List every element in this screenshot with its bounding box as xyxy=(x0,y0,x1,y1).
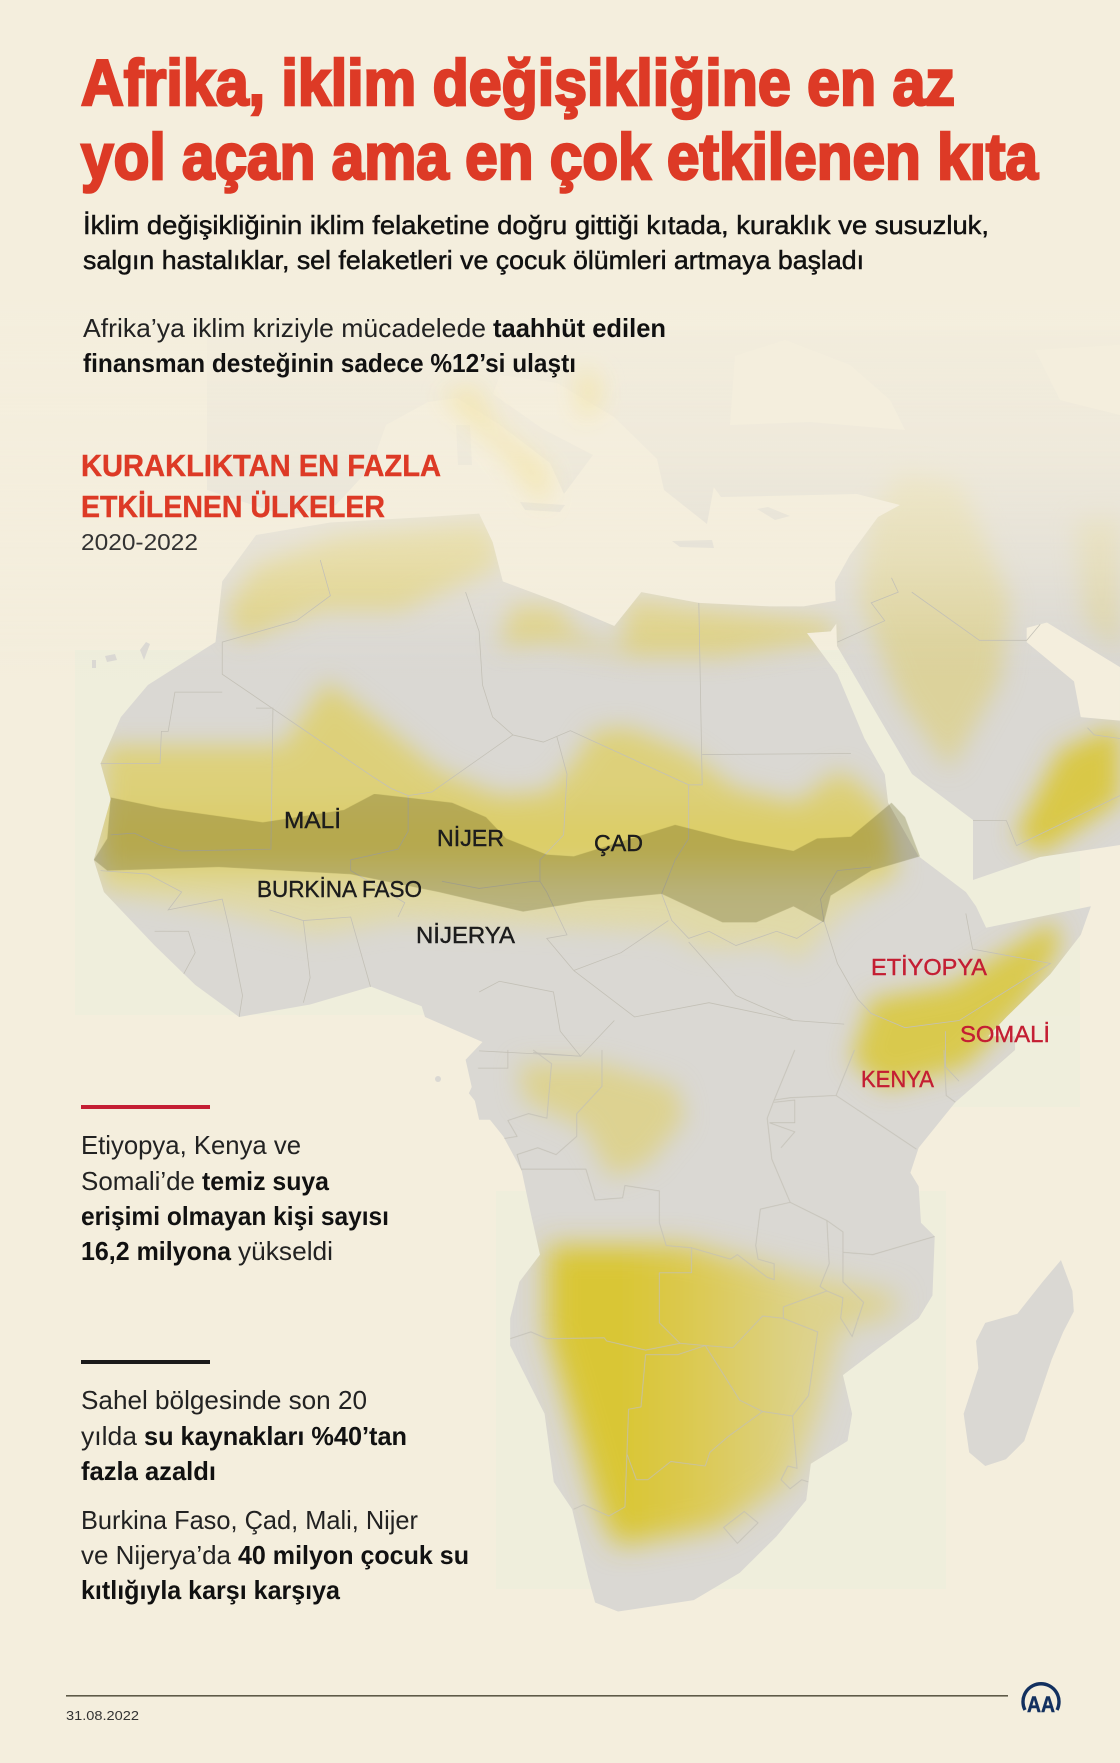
callout: clean water: Somali’de xyxy=(81,1166,195,1196)
drought zone: Southern Africa xyxy=(547,1246,896,1546)
faint tinted map panels xyxy=(75,650,1080,1589)
icon: AA logo: AA xyxy=(1027,1692,1055,1717)
title xyxy=(81,46,1039,193)
country labels: Sahel xyxy=(257,807,643,948)
callout: Sahel water resources: yılda xyxy=(81,1421,138,1451)
drought zone: Yemen and Oman xyxy=(1015,725,1120,855)
Sahel dark belt xyxy=(94,794,920,922)
callout: clean water: Etiyopya, Kenya ve xyxy=(81,1130,301,1160)
icon: AA logo xyxy=(1023,1684,1059,1717)
finance statement xyxy=(83,313,666,378)
callout: clean water: yükseldi xyxy=(238,1236,333,1266)
drought zone: Morocco and Algeria xyxy=(225,520,500,640)
drought zone: eastern Gulf xyxy=(1075,515,1120,650)
subtitle: İklim değişikliğinin iklim felaketine doğru gittiği kıtada, kuraklık ve susuzluk, xyxy=(83,210,989,240)
callout: Sahel water resources xyxy=(81,1360,469,1605)
country labels: Horn of Africa: ETİYOPYA xyxy=(871,954,988,980)
finance statement: taahhüt edilen xyxy=(493,313,666,343)
callout: Sahel water resources: Burkina Faso, Çad, Mali, Nijer xyxy=(81,1505,418,1535)
pale drought area over Italy and Balkans xyxy=(440,370,600,510)
drought zone: Central Africa xyxy=(519,1064,685,1177)
section heading: ETKİLENEN ÜLKELER xyxy=(81,489,385,524)
country borders xyxy=(101,560,1120,1543)
callout: Sahel water resources: fazla azaldı xyxy=(81,1456,216,1486)
drought zone: Sahel north xyxy=(101,681,898,963)
callout: clean water: 16,2 milyona xyxy=(81,1236,232,1266)
callout: clean water xyxy=(81,1105,389,1266)
title: Afrika, iklim değişikliğine en az xyxy=(81,46,955,119)
section heading: KURAKLIKTAN EN FAZLA xyxy=(81,448,441,483)
footer rule and date: 31.08.2022 xyxy=(66,1708,139,1723)
northern fade over Europe xyxy=(0,300,1120,680)
callout: Sahel water resources: Sahel bölgesinde son 20 xyxy=(81,1385,367,1415)
seas cut from land xyxy=(730,340,1120,721)
land masses xyxy=(92,330,1120,1612)
callout: clean water: temiz suya xyxy=(202,1166,330,1196)
country labels: Horn of Africa: SOMALİ xyxy=(960,1021,1050,1047)
finance statement: Afrika’ya iklim kriziyle mücadelede xyxy=(83,313,486,343)
callout: Sahel water resources: ve Nijerya’da xyxy=(81,1540,232,1570)
drought zone: Arabian peninsula xyxy=(860,470,1010,770)
subtitle: salgın hastalıklar, sel felaketleri ve çocuk ölümleri artmaya başladı xyxy=(83,245,864,275)
map of Africa with drought zones xyxy=(92,365,1120,1612)
drought zone: Tunisia and Libya xyxy=(499,596,837,656)
title: yol açan ama en çok etkilenen kıta xyxy=(81,120,1039,193)
subtitle xyxy=(83,210,989,275)
country labels: Horn of Africa: KENYA xyxy=(861,1066,935,1092)
callout: Sahel water resources: su kaynakları %40’tan xyxy=(144,1421,407,1451)
callout: clean water: erişimi olmayan kişi sayısı xyxy=(81,1201,389,1231)
section heading xyxy=(81,448,441,555)
country labels: Sahel: MALİ xyxy=(284,807,341,833)
country labels: Sahel: ÇAD xyxy=(594,830,643,856)
country labels: Sahel: BURKİNA FASO xyxy=(257,876,422,902)
country labels: Sahel: NİJER xyxy=(437,825,504,851)
section heading: 2020-2022 xyxy=(81,529,198,555)
country labels: Horn of Africa xyxy=(861,954,1050,1092)
callout: Sahel water resources: 40 milyon çocuk su xyxy=(238,1540,469,1570)
finance statement: finansman desteğinin sadece %12’si ulaştı xyxy=(83,348,576,378)
callout: Sahel water resources: kıtlığıyla karşı karşıya xyxy=(81,1575,341,1605)
drought zone: Horn of Africa xyxy=(851,921,1060,1088)
country labels: Sahel: NİJERYA xyxy=(416,922,516,948)
yellow drought zones xyxy=(101,470,1120,1546)
